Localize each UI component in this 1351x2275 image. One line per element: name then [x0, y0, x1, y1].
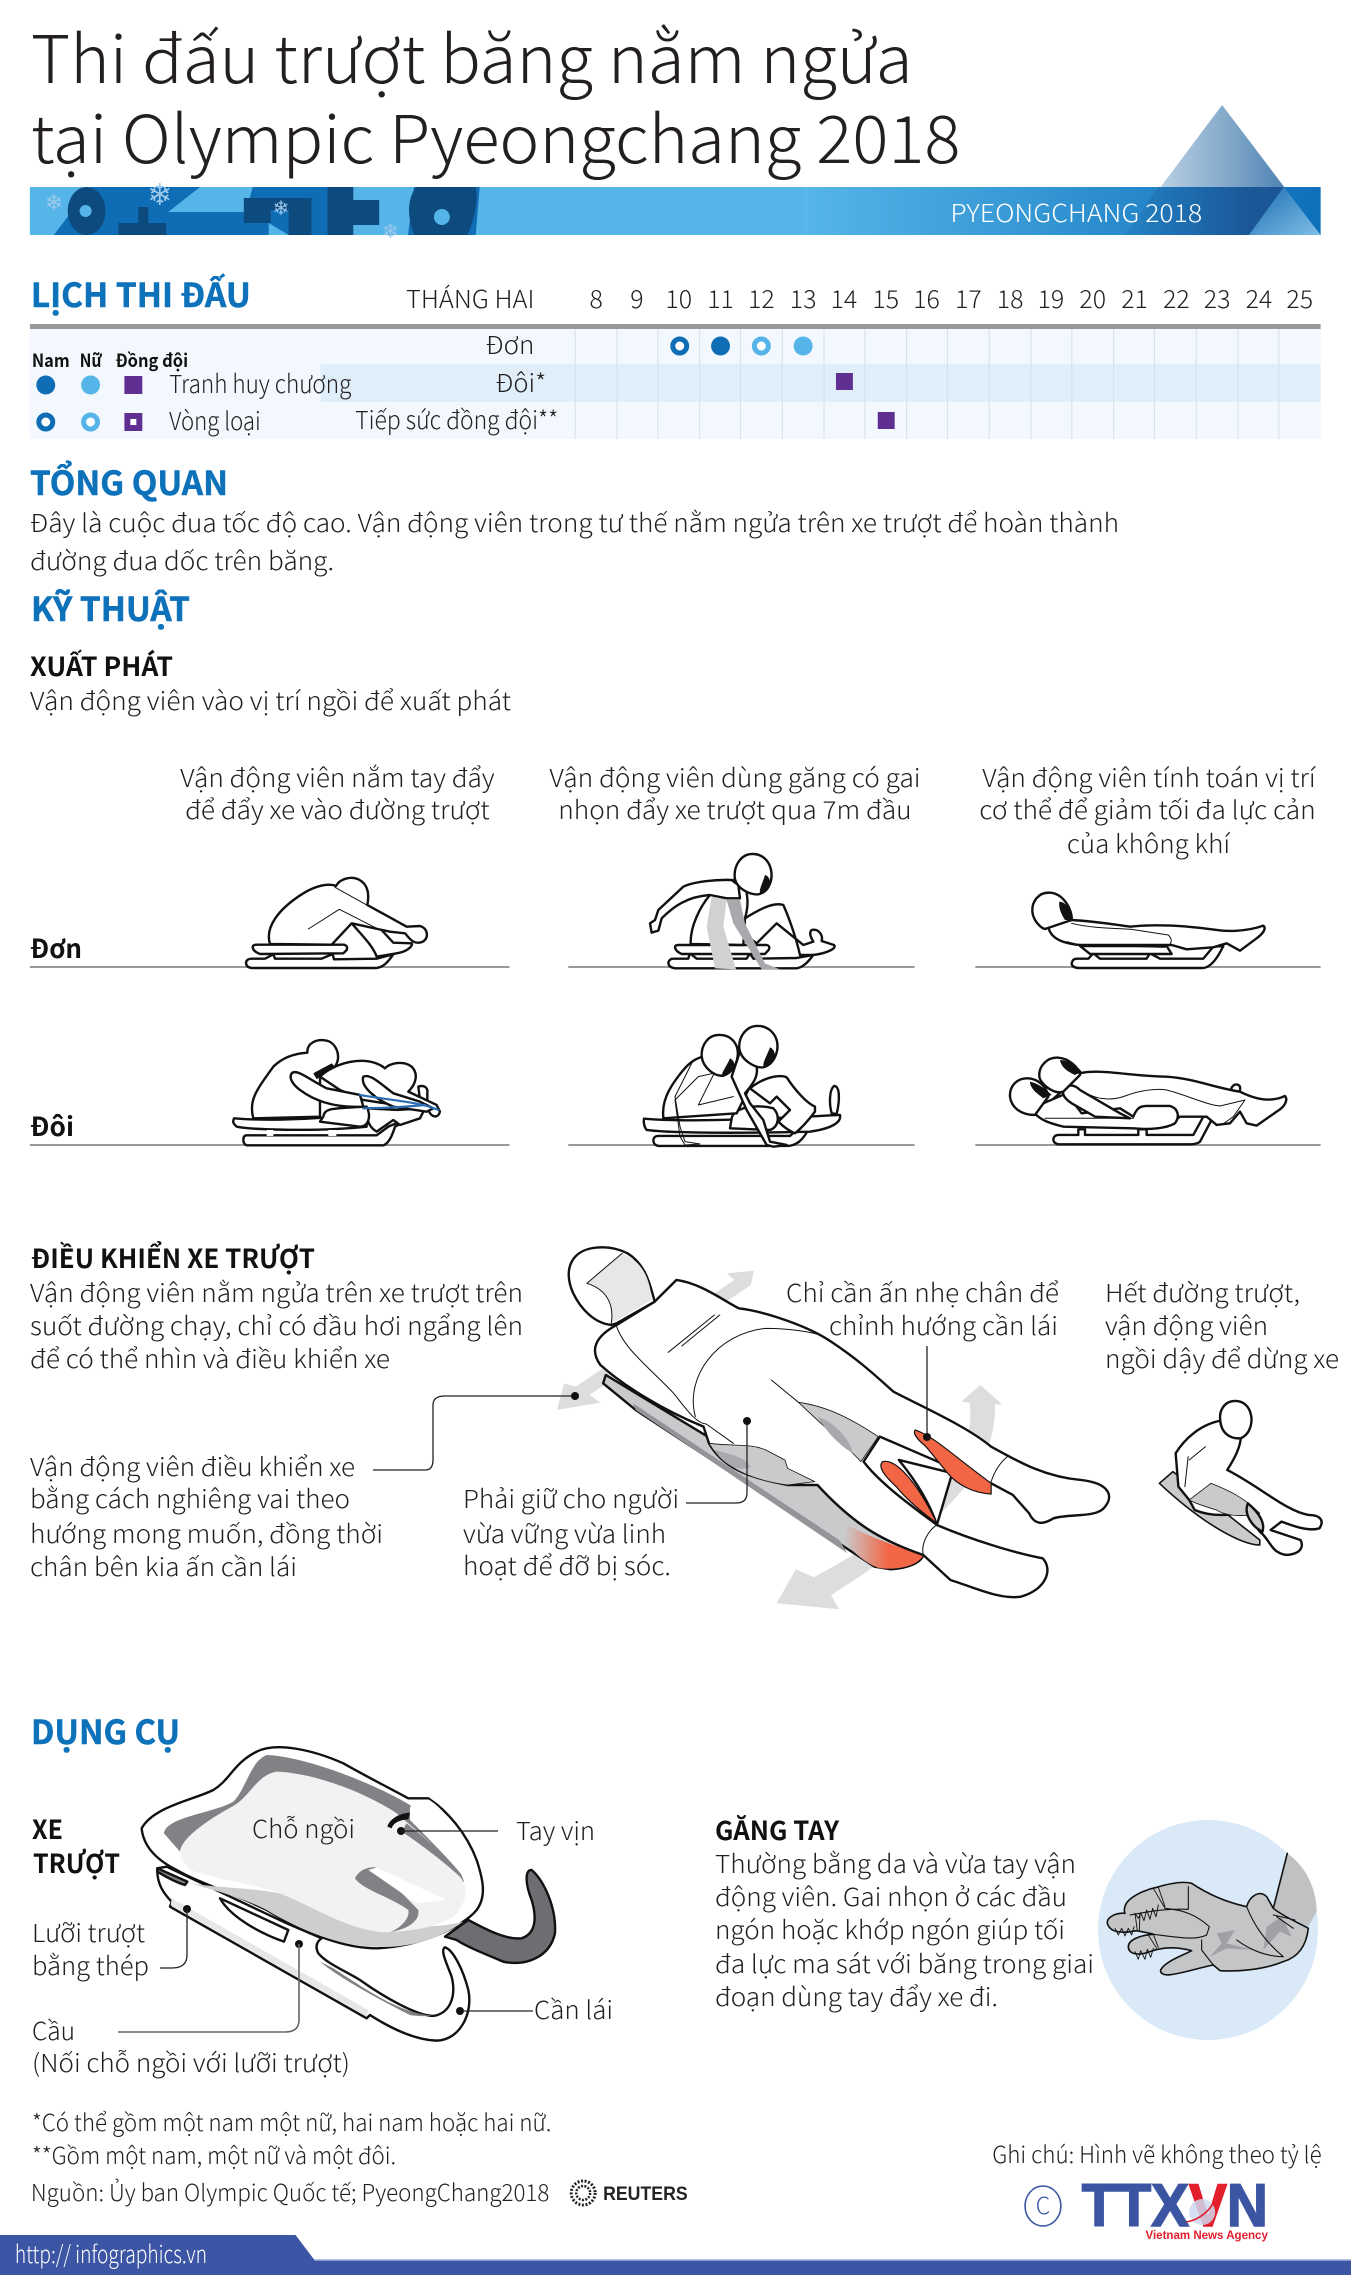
figure: luge athlete from above [557, 1247, 1109, 1609]
callout: lưỡi trượt: Lưỡi trượt [32, 1914, 145, 1950]
dates: 9 [630, 280, 644, 316]
dates: 8 [589, 280, 603, 316]
seat [142, 1747, 483, 1948]
text: stop callout: ngồi dậy để dừng xe [1105, 1340, 1339, 1376]
captions: column 2: nhọn đẩy xe trượt qua 7m đầu [558, 791, 912, 827]
dates: 17 [955, 280, 982, 316]
figure: double, aerodynamic [1010, 1058, 1286, 1144]
arrow: curved direction [777, 1385, 1002, 1609]
figure: single, aerodynamic [1032, 893, 1265, 968]
dates [589, 280, 1313, 316]
brake lever red [914, 1430, 991, 1494]
footnotes: **Gồm một nam, một nữ và một đôi. [32, 2137, 396, 2171]
text: stability callout: Phải giữ cho người [463, 1480, 679, 1516]
callout: cần lái: Cần lái [534, 1991, 613, 2027]
footer url: http:// infographics.vn [15, 2235, 207, 2270]
dates: 13 [790, 280, 816, 316]
text: lean callout: chân bên kia ấn cần lái [30, 1548, 297, 1584]
heading: kỹ thuật: KỸ THUẬT [31, 583, 190, 631]
text: glove: động viên. Gai nhọn ở các đầu [715, 1878, 1067, 1914]
callout: lưỡi trượt [32, 1905, 191, 1983]
dates: 18 [997, 280, 1023, 316]
callout: cầu: (Nối chỗ ngồi với lưỡi trượt) [32, 2044, 350, 2080]
legend: Nữ [80, 347, 103, 373]
label: chỗ ngồi: Chỗ ngồi [252, 1810, 355, 1846]
dates: 12 [748, 280, 775, 316]
logo: reuters [571, 2181, 688, 2205]
callout: cầu [32, 1940, 350, 2080]
legend: Đồng đội [115, 347, 188, 373]
callout: lưỡi trượt: bằng thép [32, 1947, 149, 1983]
text: overview: đường đua dốc trên băng. [30, 542, 334, 578]
heading: dụng cụ: DỤNG CỤ [31, 1706, 180, 1754]
event markers [673, 336, 895, 429]
steering handle [445, 1870, 555, 1963]
text: lean callout: Vận động viên điều khiển xe [30, 1448, 355, 1484]
logo: ttxvn: TTXVN [1082, 2172, 1268, 2239]
banner: ❄ [382, 215, 399, 244]
footer bar [0, 2235, 1351, 2275]
callout: tay vịn: Tay vịn [516, 1812, 595, 1848]
dates: 24 [1246, 280, 1272, 316]
text: xuất phát [30, 647, 511, 718]
text: stop callout: Hết đường trượt, [1105, 1274, 1300, 1310]
callout: cần lái [456, 1991, 613, 2027]
captions: column 2 [549, 759, 921, 827]
text: overview: Đây là cuộc đua tốc độ cao. Vận động viên trong tư thế nằm ngửa trên xe trượt để hoàn thành [30, 504, 1119, 540]
captions: column 3: Vận động viên tính toán vị trí [982, 759, 1316, 795]
text: stability callout [463, 1480, 679, 1583]
dates: 23 [1204, 280, 1230, 316]
row labels: Đơn [486, 326, 534, 362]
dates: 10 [665, 280, 692, 316]
figure: double, push start [233, 1040, 440, 1145]
figure: athlete sitting up [1159, 1401, 1322, 1555]
label: xe trượt [32, 1810, 120, 1881]
banner: ❄ [45, 186, 63, 217]
title [31, 7, 960, 182]
dates: 21 [1121, 280, 1148, 316]
captions: column 2: Vận động viên dùng găng có gai [549, 759, 921, 795]
text: stability callout: vừa vững vừa linh [463, 1515, 666, 1551]
text: overview [30, 504, 1119, 578]
row labels: Đôi* [496, 364, 546, 400]
banner label: PYEONGCHANG 2018 [950, 194, 1202, 230]
text: glove: đoạn dùng tay đẩy xe đi. [715, 1978, 998, 2014]
logo: ttxvn: C [1036, 2187, 1050, 2221]
dates: 14 [831, 280, 857, 316]
text: steering [30, 1239, 523, 1376]
text: lean callout: hướng mong muốn, đồng thời [30, 1515, 383, 1551]
dates: 19 [1038, 280, 1064, 316]
dates: 20 [1079, 280, 1106, 316]
text: steering: suốt đường chạy, chỉ có đầu hơi ngẩng lên [30, 1307, 523, 1343]
callout: tay vịn [397, 1812, 595, 1848]
figure: sled [142, 1747, 555, 2041]
captions: column 3: của không khí [1067, 825, 1231, 861]
text: stop callout: vận động viên [1105, 1307, 1268, 1343]
text: lean callout: bằng cách nghiêng vai theo [30, 1480, 350, 1516]
month label: THÁNG HAI [406, 280, 534, 316]
text: glove: GĂNG TAY [715, 1811, 840, 1848]
legend: Nam [32, 347, 70, 373]
text: xuất phát: XUẤT PHÁT [30, 647, 173, 684]
text: stop callout [1105, 1274, 1339, 1376]
row labels [355, 326, 558, 437]
schedule table [30, 280, 1321, 439]
label: xe trượt: TRƯỢT [33, 1844, 120, 1881]
title: tại Olympic Pyeongchang 2018 [31, 87, 960, 182]
leader lines: big figure [373, 1346, 931, 1503]
text: steering: ĐIỀU KHIỂN XE TRƯỢT [31, 1239, 315, 1276]
text: lever callout: Chỉ cần ấn nhẹ chân để [786, 1274, 1059, 1310]
text: steering: để có thể nhìn và điều khiển xe [30, 1340, 390, 1376]
dates: 16 [913, 280, 940, 316]
title: Thi đấu trượt băng nằm ngửa [31, 7, 913, 102]
legend: Tranh huy chương [169, 365, 352, 401]
text: glove: đa lực ma sát với băng trong giai [715, 1945, 1094, 1981]
heading: lịch thi đấu: LỊCH THI ĐẤU [31, 270, 251, 317]
captions: column 1: để đẩy xe vào đường trượt [185, 791, 490, 827]
text: stability callout: hoạt để đỡ bị sóc. [463, 1547, 671, 1583]
banner: ❄ [147, 170, 172, 214]
icon: mountain [1125, 105, 1321, 235]
dates: 11 [707, 280, 734, 316]
text: steering: Vận động viên nằm ngửa trên xe trượt trên [30, 1274, 523, 1310]
footnotes: Nguồn: Ủy ban Olympic Quốc tế; PyeongChang2018 [31, 2174, 549, 2208]
callout: cầu: Cầu [32, 2012, 75, 2048]
note: Ghi chú: Hình vẽ không theo tỷ lệ [992, 2136, 1322, 2170]
label: Đôi: Đôi [30, 1107, 74, 1144]
captions: column 3: cơ thể để giảm tối đa lực cản [979, 791, 1316, 827]
captions: column 1 [180, 759, 495, 827]
text: lever callout [786, 1274, 1059, 1343]
logo: ttxvn: Vietnam News Agency [1145, 2228, 1268, 2242]
icon: glove in circle [1098, 1820, 1318, 2040]
dates: 22 [1163, 280, 1190, 316]
footnotes: *Có thể gồm một nam một nữ, hai nam hoặc hai nữ. [32, 2104, 551, 2138]
legend: Vòng loại [169, 402, 261, 438]
dates: 15 [872, 280, 899, 316]
figure: single, push start [246, 878, 427, 968]
text: glove [715, 1811, 1094, 2014]
footnotes [31, 2104, 551, 2208]
logo: reuters: REUTERS [603, 2184, 688, 2205]
legend [32, 347, 352, 438]
dates: 25 [1286, 280, 1313, 316]
label: xe trượt: XE [32, 1810, 63, 1847]
text: xuất phát: Vận động viên vào vị trí ngồi để xuất phát [30, 682, 511, 718]
text: lean callout [30, 1448, 383, 1584]
arrow: shoulder lean [557, 1271, 754, 1410]
figure: double, spiked glove [644, 1026, 840, 1147]
captions: column 3 [979, 759, 1316, 861]
banner [30, 170, 1321, 244]
runner [157, 1867, 469, 2041]
row labels: Tiếp sức đồng đội** [355, 401, 558, 437]
text: lever callout: chỉnh hướng cần lái [829, 1307, 1058, 1343]
text: glove: Thường bằng da và vừa tay vận [715, 1845, 1076, 1881]
banner: ❄ [273, 192, 289, 221]
captions: column 1: Vận động viên nắm tay đẩy [180, 759, 495, 795]
heading: tổng quan: TỔNG QUAN [30, 457, 228, 505]
text: glove: ngón hoặc khớp ngón giúp tối [715, 1911, 1065, 1947]
label: Đơn: Đơn [30, 929, 82, 966]
figure: single, spiked glove [650, 854, 835, 969]
